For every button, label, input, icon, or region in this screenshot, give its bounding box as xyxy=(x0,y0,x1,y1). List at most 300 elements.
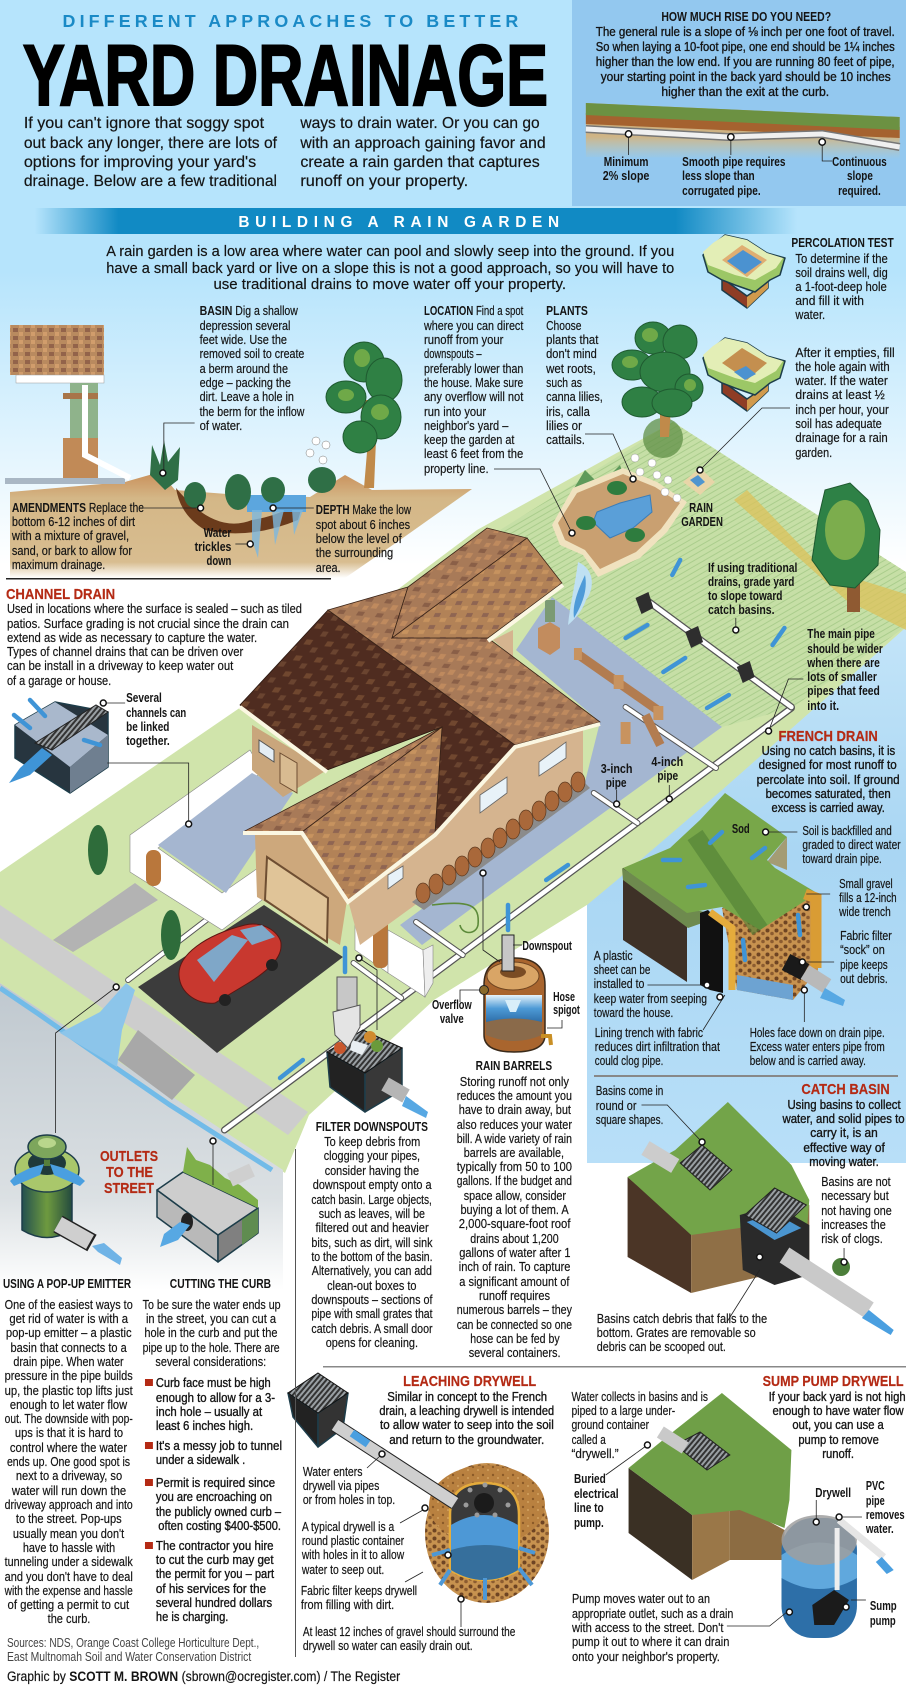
traditional drains note: drains, grade yard xyxy=(708,574,794,589)
panel: sump drywell illustration xyxy=(629,1393,894,1638)
catch basin text: CATCH BASIN xyxy=(801,1081,890,1098)
french drain text: below and is carried away. xyxy=(750,1053,866,1068)
basin text: dirt. Leave a hole in xyxy=(200,389,294,404)
pop-up emitter text: driveway approach and into xyxy=(5,1497,133,1512)
leaching drywell text: round plastic container xyxy=(302,1533,405,1548)
divider: garden xyxy=(6,578,331,580)
cutting the curb text: of his services for the xyxy=(156,1581,266,1596)
filter downspouts text: bits, such as dirt, will sink xyxy=(311,1235,433,1250)
french drain text: keep water from seeping xyxy=(594,991,707,1006)
leaching drywell text: to allow water to seep into the soil xyxy=(380,1417,554,1432)
basin liner xyxy=(176,488,305,533)
filter downspouts text: filtered out and heavier xyxy=(315,1220,429,1235)
intro text: create a rain garden that captures xyxy=(300,154,540,171)
basin text: a berm around the xyxy=(200,361,288,376)
leaching drywell text: with holes in it to allow xyxy=(301,1547,405,1562)
pop-up emitter text: ends up. One good spot is xyxy=(7,1454,130,1469)
cutting the curb text: Permit is required since xyxy=(156,1475,275,1490)
french drain text: wide trench xyxy=(838,904,891,919)
french drain text: Small gravel xyxy=(839,876,893,891)
lilies xyxy=(306,437,330,464)
background: right blue panel xyxy=(587,600,912,1163)
rain barrels text: gallons. If the budget and xyxy=(457,1173,572,1188)
outlets heading: OUTLETS xyxy=(100,1148,158,1165)
rain barrels text: 2,000-square-foot roof xyxy=(459,1216,571,1231)
pipe size labels: 3-inch xyxy=(601,761,633,776)
plants text xyxy=(545,303,603,447)
panel: catch basin illustration xyxy=(628,1102,894,1335)
channel drain text: be linked xyxy=(126,719,169,734)
cutting the curb text: several hundred dollars xyxy=(156,1595,272,1610)
panel: how much rise text: less slope than xyxy=(682,168,755,183)
pop-up emitter text: control where the water xyxy=(10,1440,128,1455)
walkway xyxy=(53,883,158,952)
rain barrels text: bill. A wide variety of rain xyxy=(457,1131,572,1146)
sump pump drywell text: PVC xyxy=(866,1478,885,1493)
filter downspouts text: downspouts – sections of xyxy=(311,1292,433,1307)
percolation test text: drains at least ½ xyxy=(795,387,885,402)
french drain text: Sod xyxy=(732,821,750,836)
house: light rear roof plane xyxy=(328,587,600,745)
leaching drywell text: drywell so water can easily drain out. xyxy=(303,1638,473,1653)
fascia boards xyxy=(240,585,600,902)
pop-up emitter text: to the street. Pop-ups xyxy=(16,1511,122,1526)
percolation hole on lawn xyxy=(683,468,715,495)
location text: run into your xyxy=(424,404,487,419)
sump pump drywell text: runoff. xyxy=(822,1446,854,1461)
garden cross-section soil xyxy=(10,472,472,578)
catch basin text: Basins come in xyxy=(596,1083,663,1098)
garden hose xyxy=(432,903,478,932)
depth text: spot about 6 inches xyxy=(316,517,410,532)
side path xyxy=(400,597,722,945)
channel drain text: can be install in a driveway to keep water out xyxy=(7,658,234,673)
sump pump drywell text: pump to remove xyxy=(798,1432,879,1447)
divider: drywell xyxy=(323,1366,906,1368)
sump pump drywell text: Drywell xyxy=(815,1485,851,1500)
cutting the curb text: Curb face must be high xyxy=(156,1375,271,1390)
channel drain text: together. xyxy=(126,733,170,748)
intro text: options for improving your yard's xyxy=(24,154,256,171)
french drain text: FRENCH DRAIN xyxy=(779,728,878,745)
filter downspouts text: consider having the xyxy=(325,1163,419,1178)
plants text: cattails. xyxy=(546,432,585,447)
basin text: of water. xyxy=(200,418,242,433)
percolation test text: After it empties, fill xyxy=(795,345,895,360)
sump pump drywell text: electrical xyxy=(574,1486,619,1501)
leaching drywell text: and return to the groundwater. xyxy=(389,1432,544,1447)
plants text: Choose xyxy=(546,318,582,333)
location text: neighbor's yard – xyxy=(424,418,509,433)
catch basin text: debris can be scooped out. xyxy=(597,1339,726,1354)
leaching drywell text: At least 12 inches of gravel should surround the xyxy=(303,1624,515,1639)
callout leader lines xyxy=(56,423,866,1626)
tree: back yard xyxy=(612,322,703,458)
catch basin text: necessary but xyxy=(821,1188,889,1203)
leaching drywell text: or from holes in top. xyxy=(303,1492,395,1507)
house: patio xyxy=(158,773,293,893)
plants text: canna lilies, xyxy=(546,389,603,404)
rain garden intro xyxy=(106,244,674,293)
pop-up emitter text: out. The downside with pop- xyxy=(5,1411,133,1426)
main pipe note: The main pipe xyxy=(807,626,875,641)
cutting the curb text: often costing $400-$500. xyxy=(158,1518,281,1533)
catch basin text: Using basins to collect xyxy=(787,1097,901,1112)
car xyxy=(179,924,281,1006)
traditional drains note: catch basins. xyxy=(708,602,775,617)
rear porch wall xyxy=(493,630,513,657)
panel: how much rise background xyxy=(572,0,912,206)
rain barrels text: hose can be fed by xyxy=(470,1331,560,1346)
filter downspouts text: catch debris. A small door xyxy=(311,1321,433,1336)
cutting the curb text: in the street, you can cut a xyxy=(146,1311,277,1326)
filter downspouts text: clogging your pipes, xyxy=(324,1148,420,1163)
rain barrels text: gallons of water after 1 xyxy=(459,1245,570,1260)
icon: rain barrel xyxy=(480,905,551,1052)
rain barrels text: space allow, consider xyxy=(464,1188,567,1203)
driveway apron xyxy=(118,1030,195,1100)
plants text: don't mind xyxy=(546,346,597,361)
sump pump drywell text: with access to the street. Don't xyxy=(571,1620,724,1635)
pop-up emitter text: USING A POP-UP EMITTER xyxy=(3,1276,132,1291)
house: front gable xyxy=(243,727,442,900)
catch basin text: moving water. xyxy=(809,1154,879,1169)
credit: Graphic by SCOTT M. BROWN (sbrown@ocregister.com) / The Register xyxy=(7,1668,400,1684)
right wall xyxy=(348,728,583,945)
panel: emitter illustration xyxy=(10,1135,122,1265)
panel: channel drain icon xyxy=(9,700,108,793)
house: patio walls xyxy=(130,750,262,930)
divider: catch basin xyxy=(594,1075,898,1077)
filter downspouts text: Alternatively, you can add xyxy=(312,1263,432,1278)
panel: how much rise text: corrugated pipe. xyxy=(682,183,761,198)
sump pump drywell text: Pump moves water out to an xyxy=(572,1591,710,1606)
outlet spray xyxy=(60,983,135,1067)
sump pump drywell text: piped to a large under- xyxy=(572,1403,675,1418)
house: dark roof plane xyxy=(240,610,515,833)
sump pump drywell text: “drywell.” xyxy=(572,1446,619,1461)
sump pump drywell text: ground container xyxy=(572,1417,650,1432)
filter downspouts text: downspout empty onto a xyxy=(313,1177,432,1192)
main pipe note: pipes that feed xyxy=(807,683,880,698)
brick wall xyxy=(574,648,663,745)
plants text: wet roots, xyxy=(545,361,596,376)
basin text: removed soil to create xyxy=(200,346,304,361)
pop-up emitter text: enough to let water flow xyxy=(10,1397,128,1412)
windows xyxy=(388,742,566,889)
basin text xyxy=(200,303,305,433)
filter downspouts text: opens for cleaning. xyxy=(326,1335,418,1350)
flower strip xyxy=(734,490,912,633)
depth text: the surrounding xyxy=(316,545,393,560)
panel: how much rise text: your starting point in the back yard should be 10 inches xyxy=(601,69,891,84)
sump pump drywell text: onto your neighbor's property. xyxy=(572,1649,720,1664)
background: blue sky wash xyxy=(0,0,912,565)
plants text: iris, calla xyxy=(546,404,591,419)
leaching drywell text: Similar in concept to the French xyxy=(387,1389,547,1404)
channel drain text: patios. Surface grading is not crucial since the drain can xyxy=(7,616,289,631)
sources xyxy=(7,1635,259,1664)
rain barrels text: RAIN BARRELS xyxy=(476,1058,552,1073)
divider: left column xyxy=(295,1149,296,1657)
outlets heading xyxy=(100,1148,158,1197)
intro text: runoff on your property. xyxy=(300,173,468,190)
tree: right xyxy=(812,483,880,612)
rain barrels text: can be connected so one xyxy=(457,1317,572,1332)
french drain text: sheet can be xyxy=(594,962,650,977)
basin plants xyxy=(150,440,336,510)
amendments text: maximum drainage. xyxy=(12,557,105,572)
main pipe note: lots of smaller xyxy=(807,669,877,684)
basin text: depression several xyxy=(200,318,291,333)
callout dots xyxy=(100,470,849,1615)
channel drain text: channels can xyxy=(126,705,186,720)
rain barrels text: reduces the amount you xyxy=(457,1088,572,1103)
french drain text: percolate into soil. If ground xyxy=(757,772,900,787)
barrel labels: Downspout xyxy=(522,938,572,953)
lawn flow arrows xyxy=(280,560,784,1078)
panel: curb illustration xyxy=(157,1147,258,1262)
plants text: lilies or xyxy=(546,418,583,433)
sump pump drywell text: line to xyxy=(574,1500,604,1515)
sump pump drywell text: pump it out to where it can drain xyxy=(572,1634,729,1649)
house: upper gable xyxy=(392,528,562,638)
catch basin text: Basins catch debris that falls to the xyxy=(597,1311,767,1326)
pipe size labels xyxy=(601,754,683,790)
basin text: the berm for the inflow xyxy=(200,404,305,419)
panel: how much rise text: higher than the exit at the curb. xyxy=(661,84,829,99)
cutting the curb text: It's a messy job to tunnel xyxy=(156,1438,282,1453)
cutting the curb text: under a sidewalk . xyxy=(156,1452,245,1467)
garage door xyxy=(265,857,328,942)
barrel labels: Overflow xyxy=(432,997,472,1012)
catch basin text: risk of clogs. xyxy=(821,1231,883,1246)
basin text: edge – packing the xyxy=(200,375,291,390)
intro text: ways to drain water. Or you can go xyxy=(299,115,540,132)
outlets heading: TO THE xyxy=(106,1164,153,1181)
rain barrels text: Storing runoff not only xyxy=(460,1074,569,1089)
channel drain text: CHANNEL DRAIN xyxy=(6,586,115,603)
pop-up emitter text: up, the plastic top lifts just xyxy=(5,1383,133,1398)
garden house wall xyxy=(5,325,130,484)
banner: building a rain garden: BUILDING A RAIN GARDEN xyxy=(238,214,559,231)
cutting the curb text: inch hole – usually at xyxy=(156,1404,263,1419)
cutting the curb text: he is charging. xyxy=(156,1609,228,1624)
cutting the curb text: enough to allow for a 3- xyxy=(156,1390,275,1405)
intro text: with an approach gaining favor and xyxy=(299,135,546,152)
rain barrels text: runoff requires xyxy=(479,1288,550,1303)
callout leader lines, garden and barrels xyxy=(213,408,790,1627)
cutting the curb text: hole in the curb and put the xyxy=(144,1325,277,1340)
pipe size labels: pipe xyxy=(606,775,627,790)
location text: least 6 feet from the xyxy=(424,446,523,461)
catch basin text: increases the xyxy=(821,1217,886,1232)
channel drain text: Several xyxy=(126,690,162,705)
filter downspouts text: clean-out boxes to xyxy=(327,1278,416,1293)
sump pump drywell text: pump. xyxy=(574,1515,604,1530)
sump pump drywell text xyxy=(571,1373,906,1664)
cutting the curb text: you are encroaching on xyxy=(156,1489,272,1504)
back wall xyxy=(252,725,327,797)
leaching drywell text: Fabric filter keeps drywell xyxy=(301,1583,417,1598)
rain garden label: GARDEN xyxy=(681,514,723,529)
back door and window xyxy=(259,740,297,793)
percolation test text xyxy=(791,235,895,460)
main pipe note: into it. xyxy=(807,698,839,713)
cutting the curb text: pipe up to the hole. There are xyxy=(143,1340,280,1355)
catch basin text: round or xyxy=(596,1098,637,1113)
french drain text: Using no catch basins, it is xyxy=(762,743,895,758)
barrel labels: valve xyxy=(440,1011,464,1026)
pop-up emitter text: pop-up emitter – a plastic xyxy=(6,1325,132,1340)
channel drain text: Used in locations where the surface is sealed – such as tiled xyxy=(7,601,302,616)
sump pump drywell text: Buried xyxy=(574,1471,606,1486)
panel: how much rise text: 2% slope xyxy=(603,168,649,183)
amendments text: bottom 6-12 inches of dirt xyxy=(12,514,135,529)
pipe size labels: pipe xyxy=(657,768,678,783)
depth text: area. xyxy=(316,560,341,575)
traditional drains note: If using traditional xyxy=(708,560,797,575)
icon: catch basin filter downspout xyxy=(327,948,428,1118)
water trickles label: down xyxy=(207,553,231,568)
panel: french drain illustration xyxy=(622,793,845,1006)
leaching drywell text xyxy=(301,1373,554,1653)
leaching drywell text: drywell via pipes xyxy=(303,1478,379,1493)
location text: where you can direct xyxy=(423,318,524,333)
basin water xyxy=(247,495,306,512)
percolation test text: water. xyxy=(795,307,825,322)
rain garden xyxy=(552,454,687,625)
banner: building a rain garden xyxy=(35,208,797,234)
channel drain text: Types of channel drains that can be driven over xyxy=(7,644,244,659)
panel: how much rise text: slope xyxy=(847,168,873,183)
rain garden intro: A rain garden is a low area where water can pool and slowly seep into the ground. If you xyxy=(106,244,674,260)
percolation test text: garden. xyxy=(795,445,832,460)
barrel labels: spigot xyxy=(553,1002,580,1017)
cutting the curb text: CUTTING THE CURB xyxy=(170,1276,271,1291)
rain barrels text: a significant amount of xyxy=(459,1274,570,1289)
traditional drains note: to slope toward xyxy=(708,588,783,603)
percolation test text: inch per hour, your xyxy=(795,402,889,417)
filter downspouts text: catch basin. Large objects, xyxy=(311,1192,432,1207)
intro text: If you can't ignore that soggy spot xyxy=(24,115,265,132)
percolation test text: soil has adequate xyxy=(795,416,882,431)
filter downspouts text: such as leaves, will be xyxy=(319,1206,425,1221)
catch basin text: effective way of xyxy=(803,1140,885,1155)
rain barrels text: have to drain away, but xyxy=(459,1102,571,1117)
traditional drains note xyxy=(708,560,797,617)
cutting the curb text: the permit for you – part xyxy=(156,1566,274,1581)
channel drain text: of a garage or house. xyxy=(7,673,111,688)
french drain text: “sock” on xyxy=(840,942,885,957)
amendments text xyxy=(11,500,144,572)
rain barrels text: inch of rain. To capture xyxy=(459,1259,570,1274)
percolation test text: the hole again with xyxy=(795,359,890,374)
panel: how much rise text: Smooth pipe requires xyxy=(682,154,785,169)
french drain text: Fabric filter xyxy=(840,928,892,943)
catch basin text: square shapes. xyxy=(596,1112,663,1127)
french drain text: Lining trench with fabric xyxy=(595,1025,703,1040)
french drain text: out debris. xyxy=(840,971,888,986)
pop-up emitter text: the curb. xyxy=(48,1611,90,1626)
french drain text: becomes saturated, then xyxy=(766,786,891,801)
location text: runoff from your xyxy=(424,332,504,347)
panel: how much rise text: Continuous xyxy=(832,154,887,169)
leaching drywell text: A typical drywell is a xyxy=(302,1519,395,1534)
french drain text: designed for most runoff to xyxy=(759,757,897,772)
amendments text: AMENDMENTS Replace the xyxy=(12,500,144,515)
sump pump drywell text: water. xyxy=(865,1521,894,1536)
cutting the curb text: The contractor you hire xyxy=(156,1538,274,1553)
icon: percolation block emptied xyxy=(703,338,785,411)
sump pump drywell text: Sump xyxy=(870,1598,897,1613)
rain garden label xyxy=(681,500,723,529)
filter downspouts text xyxy=(311,1119,433,1350)
panel: how much rise text: Minimum xyxy=(604,154,648,169)
pop-up emitter text: usually mean you don't xyxy=(13,1526,124,1541)
rain barrels text: several containers. xyxy=(469,1345,561,1360)
french drain text: toward the house. xyxy=(594,1005,673,1020)
main pipe note: when there are xyxy=(807,655,880,670)
gutter water xyxy=(0,988,272,1170)
pop-up emitter text: of getting a permit to cut xyxy=(8,1597,130,1612)
plants text: such as xyxy=(546,375,582,390)
leaching drywell text: drain, a leaching drywell is intended xyxy=(379,1403,554,1418)
panel: how much rise text: HOW MUCH RISE DO YOU NEED? xyxy=(661,9,831,24)
leaching drywell text: Water enters xyxy=(303,1464,362,1479)
amendments text: sand, or bark to allow for xyxy=(12,543,133,558)
right margin xyxy=(906,0,912,1686)
catch basin text: Basins are not xyxy=(821,1174,891,1189)
water trickles label: Water xyxy=(204,525,231,540)
sump pump drywell text: appropriate outlet, such as a drain xyxy=(572,1606,733,1621)
sidewalk xyxy=(0,905,308,1135)
sump pump drywell text: pump xyxy=(870,1613,896,1628)
pop-up emitter text: with the expense and hassle xyxy=(4,1583,133,1598)
pop-up emitter text: have to hassle with xyxy=(23,1540,115,1555)
percolation test text: To determine if the xyxy=(795,251,888,266)
location text: property line. xyxy=(424,461,489,476)
pop-up emitter text: next to a driveway, so xyxy=(16,1468,122,1483)
pop-up emitter text: get rid of water is with a xyxy=(9,1311,129,1326)
depth text: DEPTH Make the low xyxy=(316,502,412,517)
sources: East Multnomah Soil and Water Conservation District xyxy=(7,1649,252,1664)
french drain text: reduces dirt infiltration that xyxy=(595,1039,720,1054)
catch basins on lawn xyxy=(636,592,755,683)
location text: downspouts – xyxy=(424,346,482,361)
porch column xyxy=(538,600,560,655)
leaching drywell text: water to seep out. xyxy=(301,1562,384,1577)
pop-up emitter text xyxy=(3,1276,133,1626)
location text: the house. Make sure xyxy=(424,375,523,390)
sump pump drywell text: Water collects in basins and is xyxy=(572,1389,708,1404)
rain barrels text: buying a lot of them. A xyxy=(460,1202,569,1217)
basin text: feet wide. Use the xyxy=(200,332,287,347)
french drain text: could clog pipe. xyxy=(595,1053,663,1068)
depth text: below the level of xyxy=(316,531,402,546)
panel: how much rise text: required. xyxy=(838,183,881,198)
icon: percolation block full xyxy=(703,235,785,308)
percolation test text: drainage for a rain xyxy=(795,430,888,445)
cutting the curb text xyxy=(143,1276,282,1624)
intro text: out back any longer, there are lots of xyxy=(24,135,278,152)
street xyxy=(0,983,283,1290)
title: YARD DRAINAGE xyxy=(23,28,548,124)
filter downspouts text: to the bottom of the basin. xyxy=(311,1249,433,1264)
cutting the curb text: the publicly owned curb – xyxy=(156,1504,282,1519)
rain garden label: RAIN xyxy=(689,500,713,515)
pop-up emitter text: ups is that it is hard to xyxy=(15,1425,123,1440)
